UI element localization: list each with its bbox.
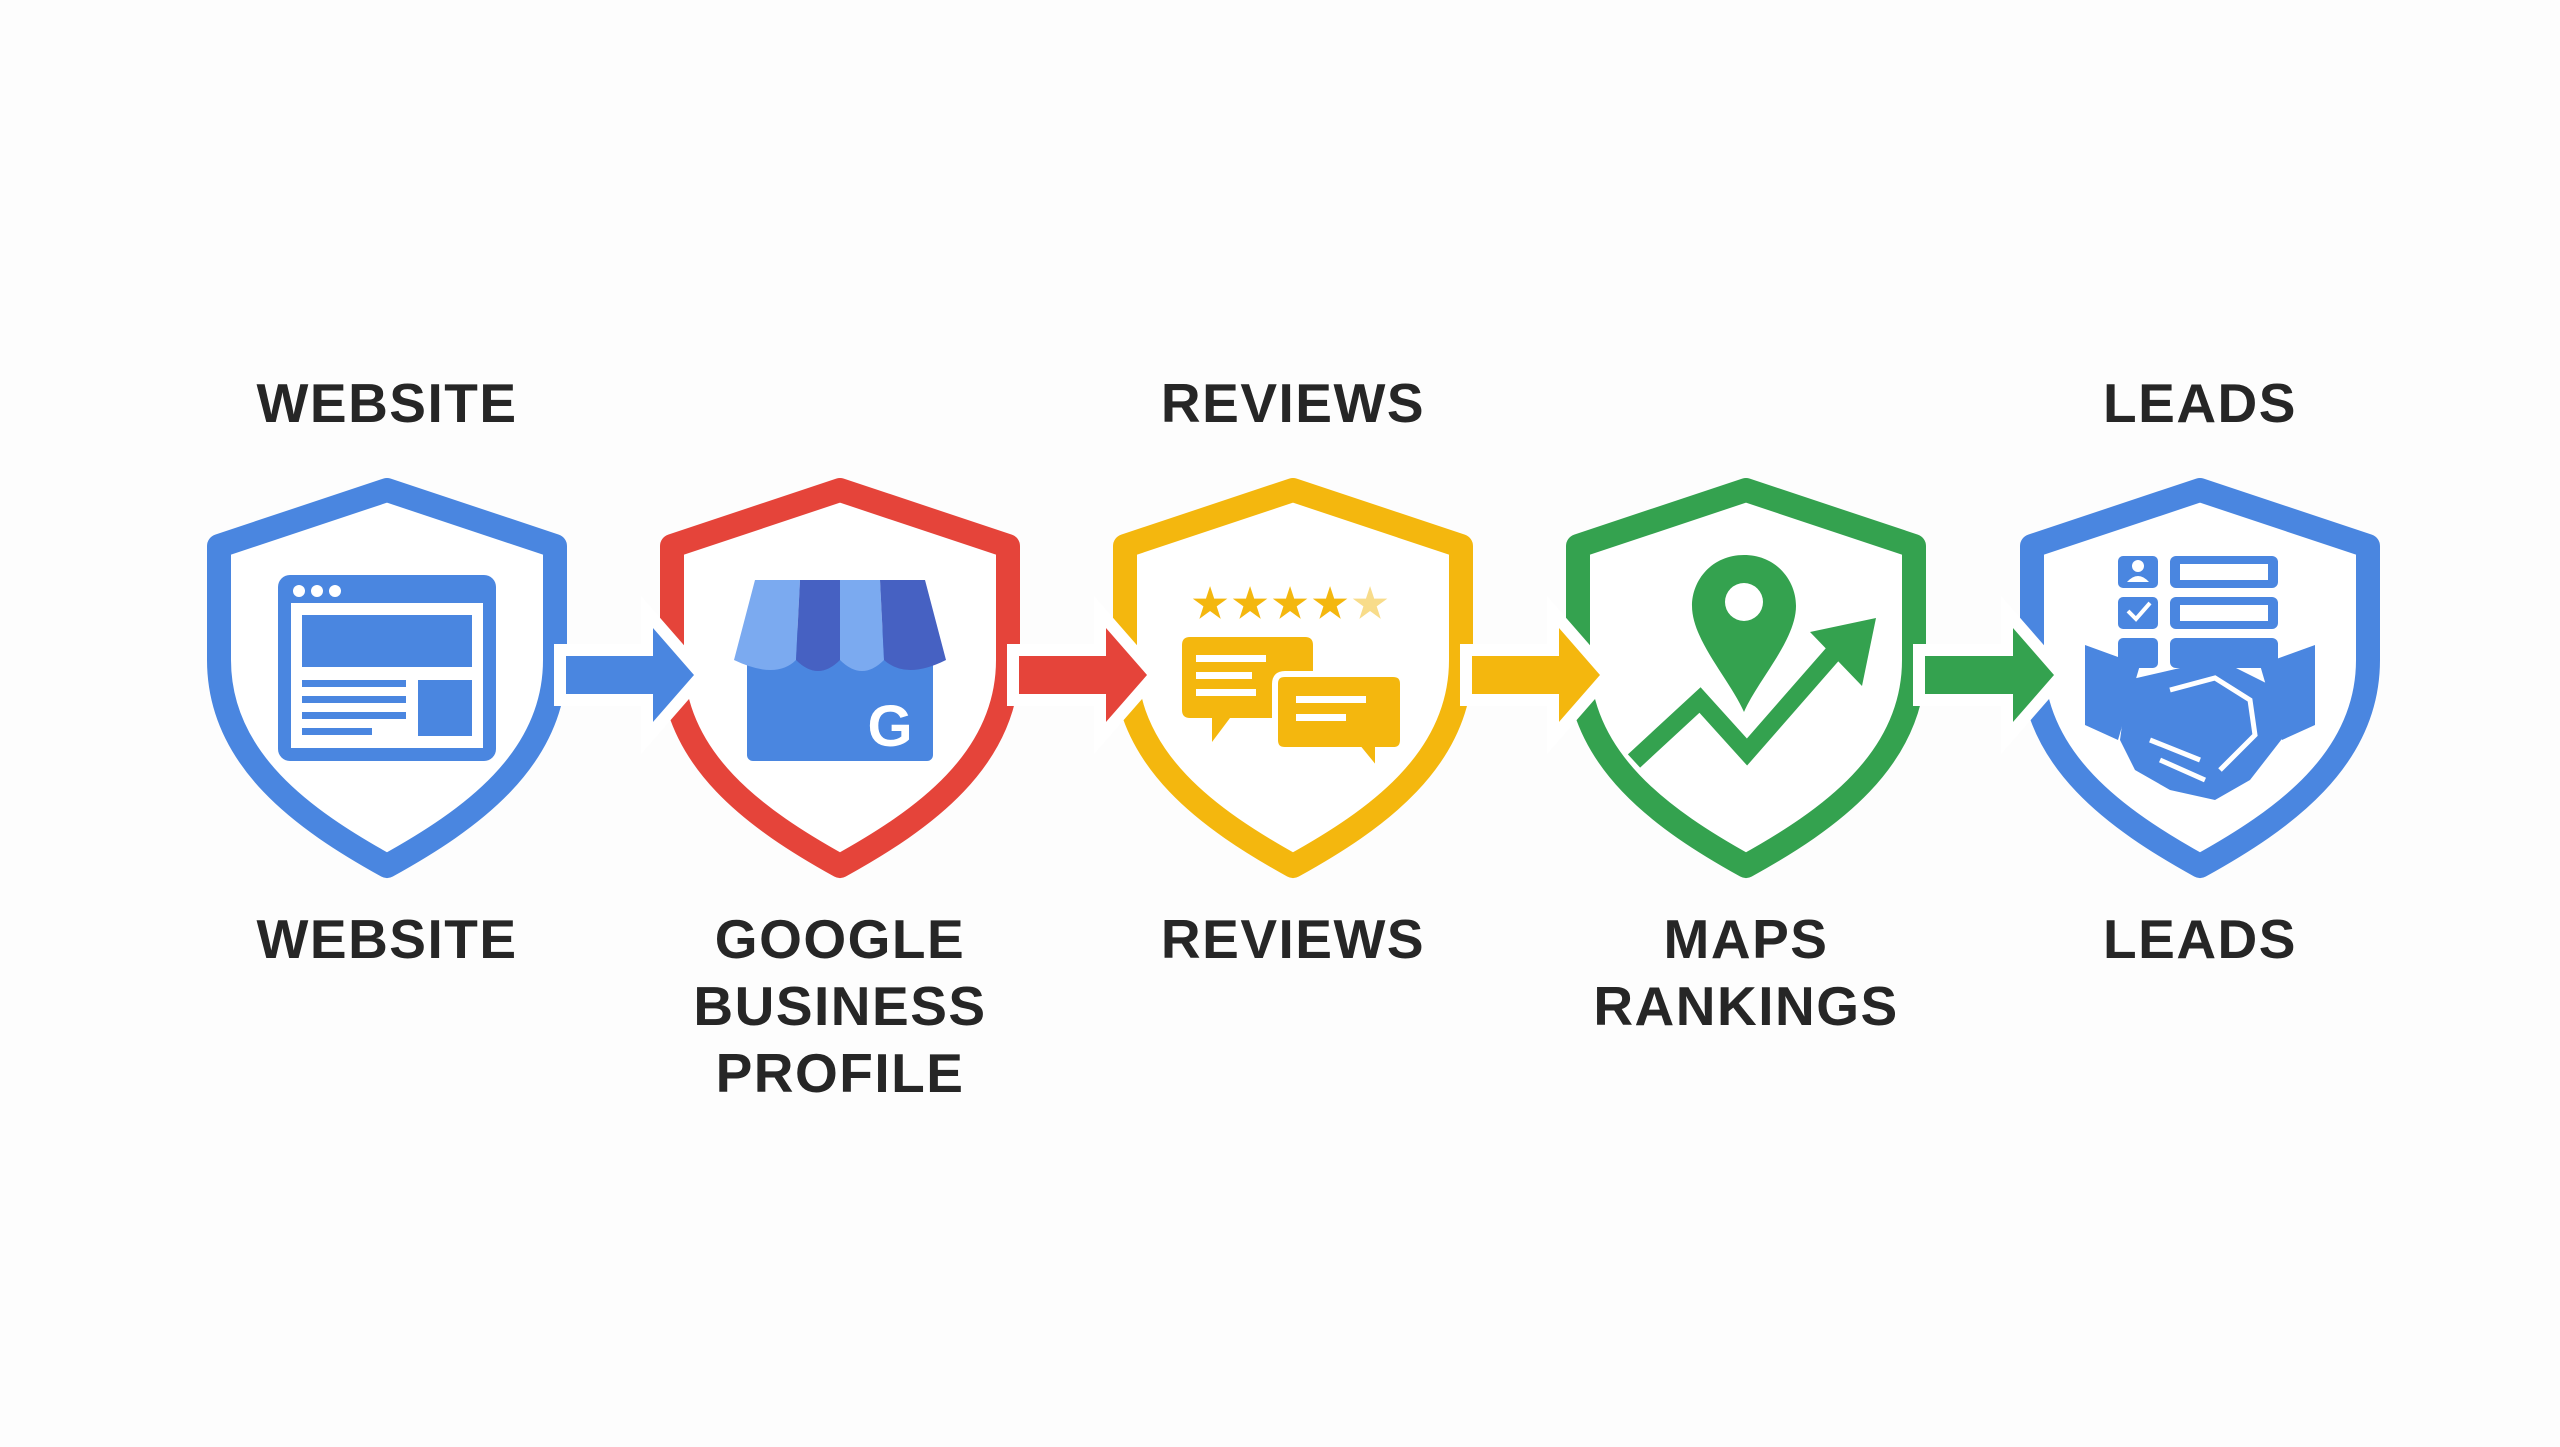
icon: google business storefront (734, 580, 946, 761)
arrow: gbp to reviews (1013, 612, 1155, 738)
icon: browser window (278, 575, 496, 761)
shield: website (219, 490, 555, 866)
shield: google business profile (672, 490, 1008, 866)
icon: google business storefront: G (867, 694, 913, 759)
icon: map pin with rising arrow (1634, 555, 1876, 761)
top label: leads: LEADS (2103, 372, 2297, 434)
icon: review stars and chat bubbles: ★ (1352, 582, 1388, 626)
arrow: maps to leads (1919, 612, 2062, 738)
bottom label: maps rankings: MAPS (1664, 908, 1828, 970)
bottom label: google business profile: PROFILE (716, 1042, 964, 1104)
bottom label: google business profile: GOOGLE (715, 908, 965, 970)
icon: review stars and chat bubbles (1182, 582, 1403, 772)
icon: review stars and chat bubbles: ★ (1192, 582, 1228, 626)
shield: maps rankings (1578, 490, 1914, 866)
shield: leads (2032, 490, 2368, 866)
arrow: reviews to maps (1466, 612, 1608, 738)
bottom label: website: WEBSITE (256, 908, 518, 970)
bottom label: leads: LEADS (2103, 908, 2297, 970)
top label: website: WEBSITE (256, 372, 518, 434)
icon: review stars and chat bubbles: ★ (1232, 582, 1268, 626)
bottom label: google business profile: BUSINESS (693, 975, 987, 1037)
arrow: website to gbp (560, 612, 702, 738)
top label: reviews: REVIEWS (1161, 372, 1425, 434)
icon: lead form and handshake (2085, 556, 2315, 800)
icon: review stars and chat bubbles: ★ (1272, 582, 1308, 626)
icon: review stars and chat bubbles: ★ (1312, 582, 1348, 626)
bottom label: reviews: REVIEWS (1161, 908, 1425, 970)
bottom label: maps rankings: RANKINGS (1593, 975, 1899, 1037)
shield: reviews (1125, 490, 1461, 866)
